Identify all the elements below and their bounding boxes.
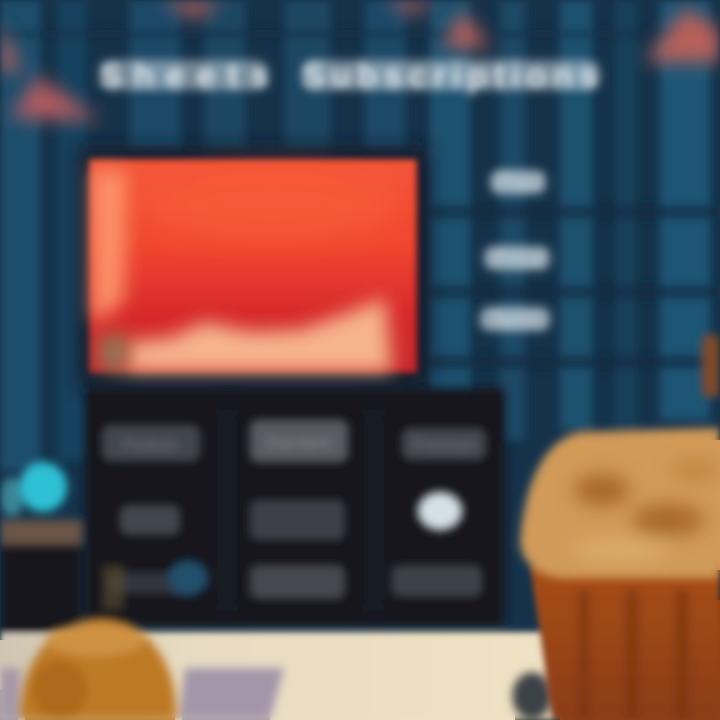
white dot icon [418,492,462,530]
bowl top [520,428,720,578]
right column labels: Term [491,307,539,332]
panel: red chart screen [78,148,428,388]
orange highlight on screen edge [92,168,128,320]
rug [0,668,284,720]
bread loaf bottom left [20,618,176,720]
side table left [0,520,124,634]
wood grain [578,590,689,720]
brown object right edge [702,335,720,397]
table labels: Feature [122,437,178,454]
title [99,57,600,95]
upper glow [140,170,400,240]
right column labels: Plan [496,170,540,195]
pink bunting decorations [0,0,720,120]
right column labels: Price [493,246,543,271]
title: Subscriptions [302,57,598,95]
title: Sheets [99,57,269,95]
table labels: Standard [266,435,330,452]
icon: cyan blob [0,462,67,517]
bowl contents [570,460,720,560]
wooden bowl [512,428,720,720]
table labels: Premium [412,437,476,454]
area chart [125,298,392,372]
floor [0,632,560,720]
table labels [102,420,486,599]
right column labels [480,170,550,332]
panel: dark data table [85,388,505,626]
blue dot icon [168,560,208,596]
